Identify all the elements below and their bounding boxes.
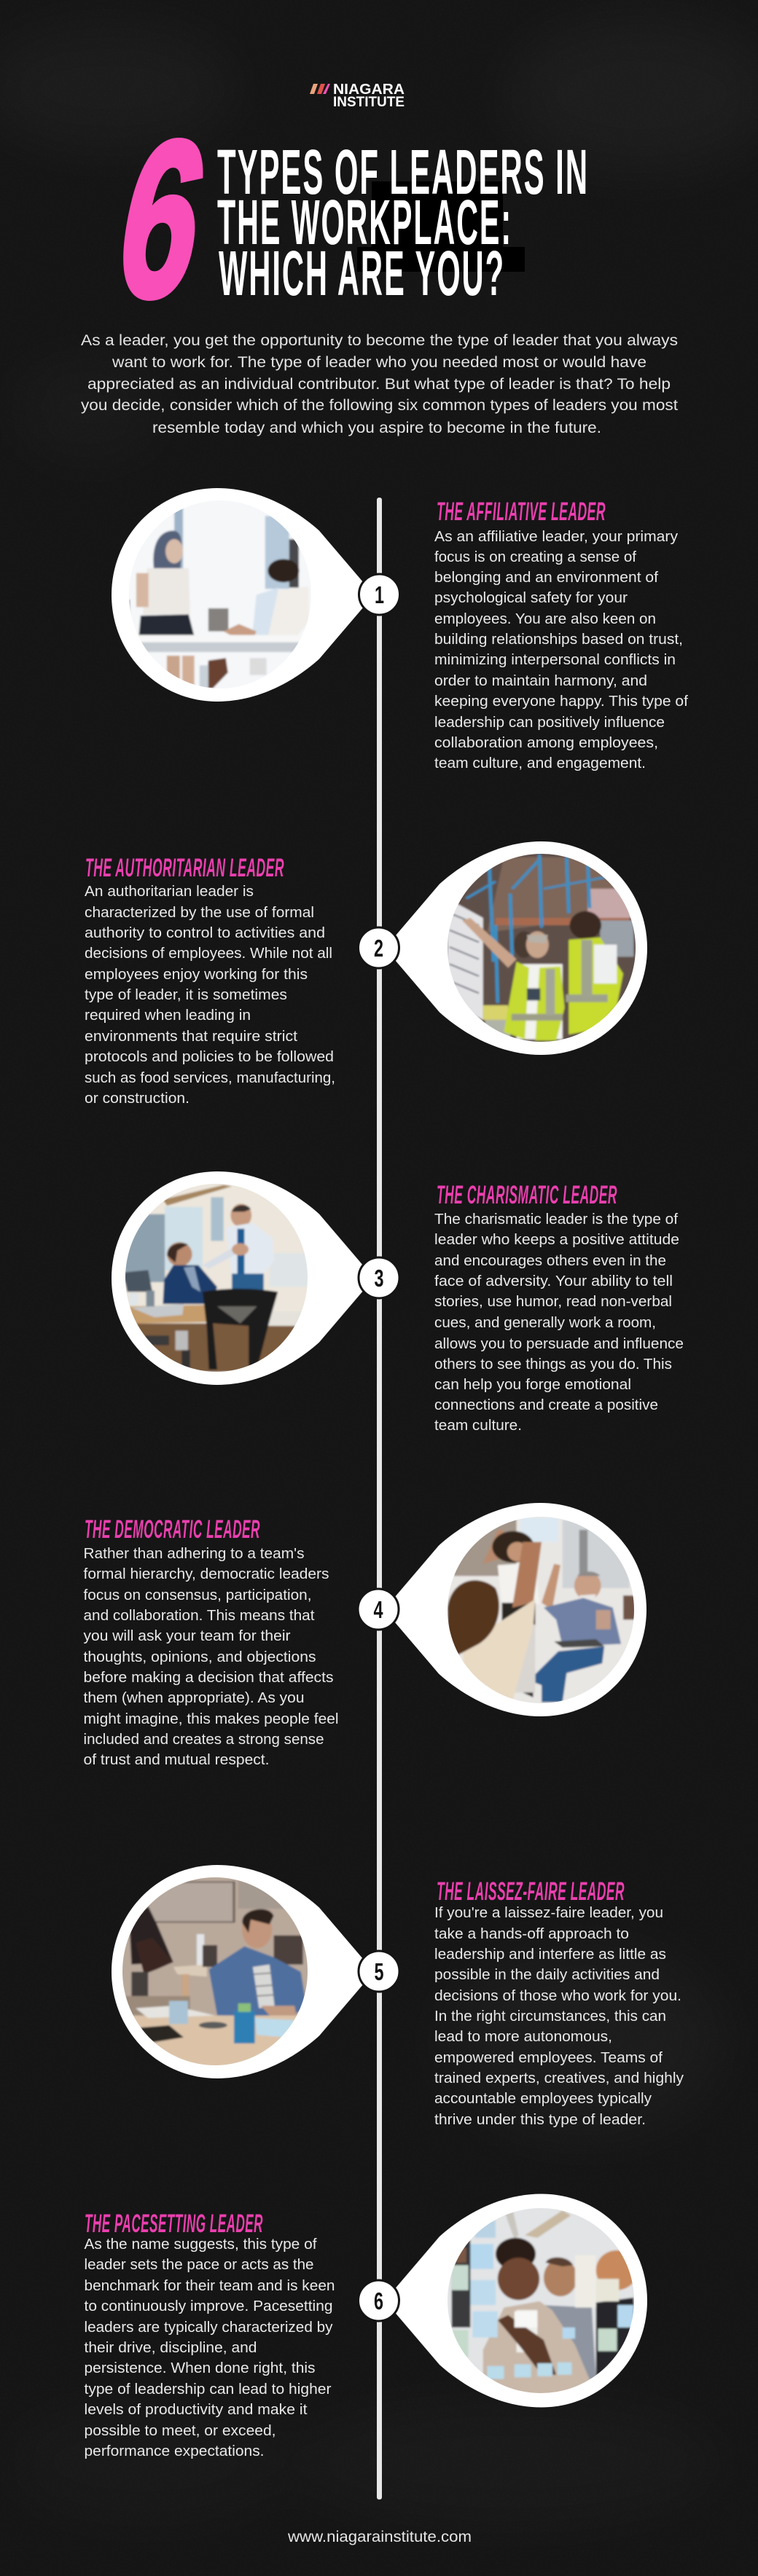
body text 3: can help you forge emotional (434, 1376, 631, 1393)
body text 5: accountable employees typically (434, 2090, 652, 2107)
intro paragraph: want to work for. The type of leader who you needed most or would have (112, 353, 646, 371)
number badge 2 (359, 927, 399, 968)
body text 1: building relationships based on trust, (434, 631, 683, 648)
body text 5: possible in the daily activities and (434, 1966, 660, 1983)
section 6: pacesetting leader: THE PACESETTING LEADER (85, 2210, 263, 2238)
body text 1: leadership can positively influence (434, 714, 665, 731)
body text 1: As an affiliative leader, your primary (434, 528, 679, 545)
body text 4: them (when appropriate). As you (83, 1689, 305, 1706)
body text 4: included and creates a strong sense (83, 1731, 324, 1748)
body text 6: possible to meet, or exceed, (85, 2422, 276, 2439)
body text 5: empowered employees. Teams of (434, 2049, 663, 2066)
drop frame 4 (384, 1503, 646, 1716)
number badge 2: 2 (374, 935, 383, 962)
body text 1: minimizing interpersonal conflicts in (434, 651, 676, 668)
logo: Niagara Institute: NIAGARA (333, 82, 405, 98)
body text 6: levels of productivity and make it (85, 2401, 308, 2418)
body text 4: of trust and mutual respect. (83, 1751, 270, 1768)
number badge 3: 3 (375, 1265, 383, 1292)
body text 4: focus on consensus, participation, (83, 1587, 311, 1603)
body text 4: might imagine, this makes people feel (83, 1711, 338, 1727)
drop frame 2 (385, 841, 647, 1055)
body text 3: face of adversity. Your ability to tell (434, 1273, 673, 1289)
section 5: laissez-faire leader (112, 1865, 684, 2128)
title (102, 95, 589, 343)
number badge 4 (358, 1589, 399, 1630)
number badge 4: 4 (373, 1596, 383, 1623)
body text 6: As the name suggests, this type of (85, 2236, 317, 2253)
body text 1: keeping everyone happy. This type of (434, 693, 688, 710)
drop frame 5 (112, 1865, 374, 2078)
body text 5 (434, 1904, 684, 2128)
body text 6: performance expectations. (85, 2443, 264, 2459)
body text 4 (83, 1545, 338, 1768)
body text 5: thrive under this type of leader. (434, 2111, 646, 2128)
body text 3: others to see things as you do. This (434, 1356, 672, 1373)
photo 5: man in denim shirt at desk (122, 1877, 308, 2065)
footer url: www.niagarainstitute.com (287, 2529, 472, 2545)
section 3: charismatic leader (112, 1171, 684, 1434)
body text 2: such as food services, manufacturing, (85, 1069, 335, 1086)
body text 3: The charismatic leader is the type of (434, 1211, 678, 1228)
body text 1: belonging and an environment of (434, 569, 658, 586)
body text 1: order to maintain harmony, and (434, 672, 647, 689)
number badge 1 (359, 574, 399, 615)
heading 2: THE AUTHORITARIAN LEADER (85, 854, 284, 882)
body text 1: psychological safety for your (434, 589, 628, 606)
body text 5: In the right circumstances, this can (434, 2008, 666, 2025)
number badge 1: 1 (375, 581, 384, 608)
section 1: affiliative leader (108, 488, 688, 771)
drop frame 6 (385, 2194, 647, 2407)
body text 4: formal hierarchy, democratic leaders (83, 1566, 329, 1582)
drop frame 1 (112, 488, 374, 702)
body text 5: trained experts, creatives, and highly (434, 2070, 684, 2086)
body text 3: and encourages others even in the (434, 1252, 666, 1269)
body text 3: leader who keeps a positive attitude (434, 1231, 679, 1248)
body text 6: leader sets the pace or acts as the (85, 2256, 314, 2273)
photo 2: warehouse workers in hi-vis vests (441, 850, 642, 1044)
body text 6: their drive, discipline, and (85, 2339, 257, 2356)
body text 2: required when leading in (85, 1007, 251, 1024)
body text 3: allows you to persuade and influence (434, 1335, 684, 1352)
body text 3: connections and create a positive (434, 1397, 658, 1413)
photo 6: woman placing sticky notes on glass (448, 2208, 634, 2393)
body text 4: you will ask your team for their (83, 1627, 291, 1644)
body text 2 (85, 883, 335, 1107)
body text 1: focus is on creating a sense of (434, 549, 636, 565)
body text 2: decisions of employees. While not all (85, 945, 332, 962)
body text 6: benchmark for their team and is keen (85, 2277, 335, 2294)
body text 2: An authoritarian leader is (85, 883, 254, 900)
body text 4: before making a decision that affects (83, 1669, 334, 1686)
intro paragraph (81, 331, 678, 436)
body text 2: characterized by the use of formal (85, 904, 314, 921)
big pink number 6: 6 (102, 95, 223, 343)
logo: Niagara Institute: INSTITUTE (333, 95, 405, 110)
body text 3: cues, and generally work a room, (434, 1314, 656, 1331)
number badge 5 (359, 1951, 399, 1992)
timeline line (377, 498, 382, 2500)
body text 2: authority to control to activities and (85, 924, 325, 941)
number badge 3 (359, 1257, 399, 1298)
body text 1 (434, 528, 688, 771)
body text 5: decisions of those who work for you. (434, 1987, 681, 2004)
body text 1: collaboration among employees, (434, 734, 658, 751)
section 6: pacesetting leader (85, 2194, 647, 2459)
logo: Niagara Institute (310, 82, 405, 110)
body text 5: leadership and interfere as little as (434, 1946, 666, 1963)
photo 3: two businessmen talking at desk (125, 1184, 308, 1372)
body text 2: type of leader, it is sometimes (85, 986, 287, 1003)
body text 2: employees enjoy working for this (85, 966, 308, 983)
body text 6: persistence. When done right, this (85, 2360, 315, 2376)
intro paragraph: As a leader, you get the opportunity to become the type of leader that you always (81, 331, 678, 349)
section 4: democratic leader: THE DEMOCRATIC LEADER (85, 1515, 260, 1544)
body text 5: If you're a laissez-faire leader, you (434, 1904, 663, 1921)
intro paragraph: appreciated as an individual contributor. But what type of leader is that? To help (87, 375, 671, 393)
body text 2: or construction. (85, 1090, 190, 1107)
photo 4: group raising hands with older man (448, 1517, 634, 1703)
body text 6 (85, 2236, 335, 2459)
body text 3: team culture. (434, 1417, 522, 1434)
body text 4: thoughts, opinions, and objections (83, 1649, 316, 1665)
section 4: democratic leader (83, 1503, 646, 1768)
body text 3: stories, use humor, read non-verbal (434, 1293, 672, 1310)
intro paragraph: resemble today and which you aspire to become in the future. (152, 419, 601, 436)
photo 1: two women at office desk (129, 500, 311, 688)
body text 2: protocols and policies to be followed (85, 1048, 334, 1065)
body text 1: employees. You are also keen on (434, 610, 656, 627)
number badge 6 (359, 2280, 399, 2321)
section 2: authoritarian leader (85, 841, 647, 1107)
body text 6: leaders are typically characterized by (85, 2319, 333, 2336)
body text 4: Rather than adhering to a team's (83, 1545, 305, 1562)
body text 6: type of leadership can lead to higher (85, 2381, 332, 2398)
body text 2: environments that require strict (85, 1028, 297, 1045)
body text 5: take a hands-off approach to (434, 1925, 629, 1942)
body text 3 (434, 1211, 684, 1434)
body text 5: lead to more autonomous, (434, 2028, 612, 2045)
number badge 6: 6 (374, 2288, 383, 2314)
body text 4: and collaboration. This means that (83, 1607, 315, 1624)
body text 1: team culture, and engagement. (434, 755, 646, 771)
intro paragraph: you decide, consider which of the following six common types of leaders you most (81, 396, 678, 414)
number badge 5: 5 (375, 1958, 383, 1985)
drop frame 3 (112, 1171, 374, 1385)
body text 6: to continuously improve. Pacesetting (85, 2298, 332, 2314)
